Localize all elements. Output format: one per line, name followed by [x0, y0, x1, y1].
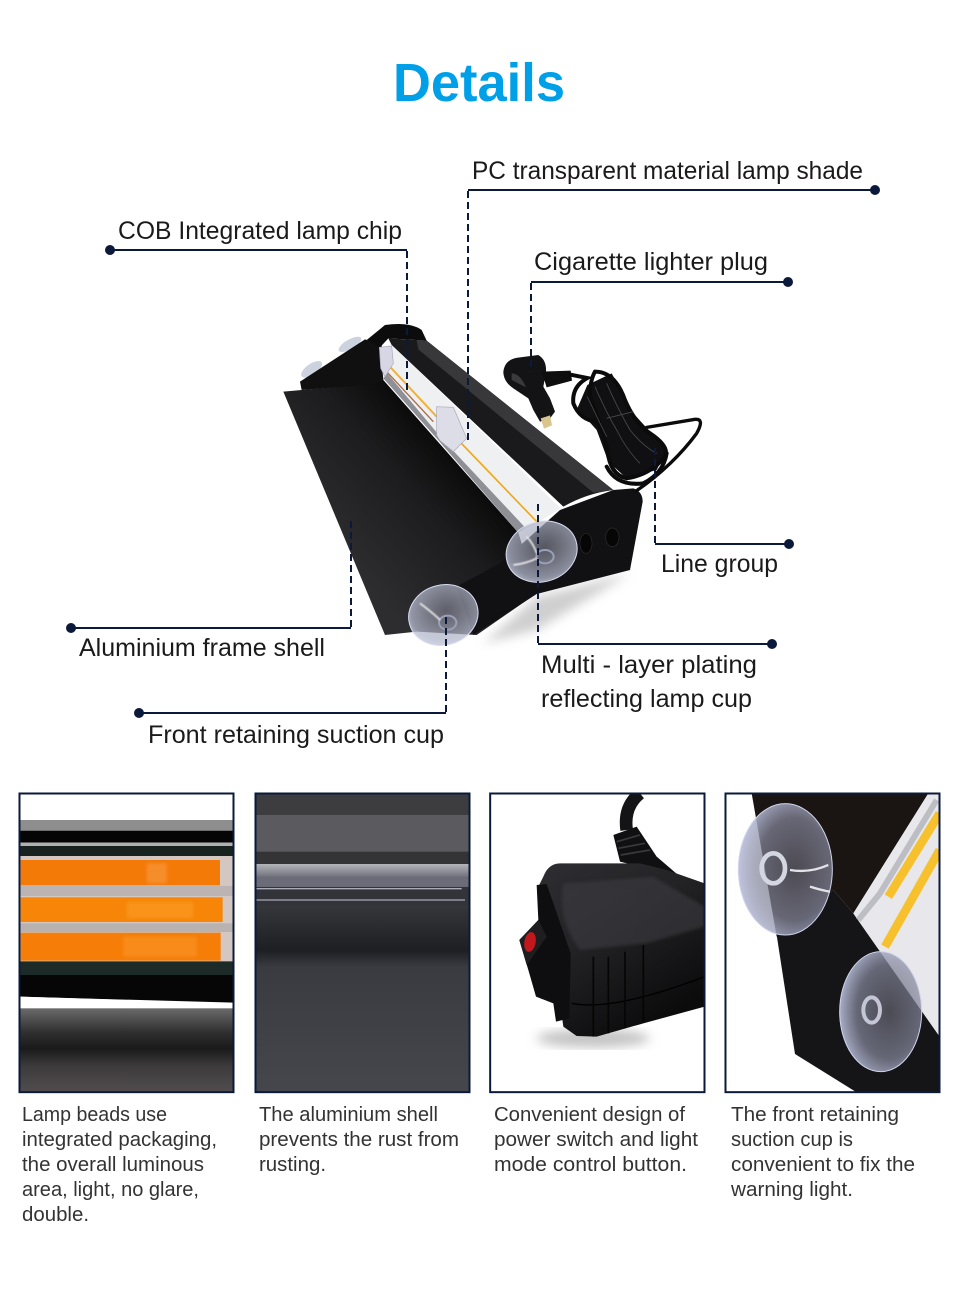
centre lens clip: [437, 407, 467, 452]
callout: Cigarette lighter plug: [531, 248, 793, 372]
callout: Aluminium frame shell: [66, 517, 351, 662]
callout: Multi-layer plating reflecting lamp cup: reflecting lamp cup: [541, 685, 752, 713]
callout: Cigarette lighter plug: Cigarette lighter plug: [534, 248, 768, 276]
red indicator: [524, 932, 536, 952]
callout: PC transparent material lamp shade: PC transparent material lamp shade: [472, 157, 863, 185]
caption: lamp beads: the overall luminous: [22, 1154, 204, 1176]
top suction cups: [298, 333, 364, 382]
plug body: [503, 355, 555, 422]
switch housing: [538, 863, 705, 1037]
lower suction cup: [840, 952, 922, 1072]
product photo: strobe light bar: [283, 324, 643, 653]
callout: Multi-layer plating reflecting lamp cup: Multi - layer plating: [541, 651, 757, 679]
ground shadow: [483, 573, 630, 643]
coil mass: [577, 373, 667, 478]
caption: aluminium shell: prevents the rust from: [259, 1129, 459, 1151]
plug tip: [541, 415, 552, 429]
dark bracket: [752, 793, 928, 937]
callout: COB Integrated lamp chip: COB Integrated lamp chip: [118, 217, 402, 245]
panel: suction cups photo: [725, 793, 940, 1092]
rocker switch: [519, 884, 571, 1022]
lower bracket band and end plate: [457, 488, 643, 635]
shadow: [537, 1029, 650, 1048]
caption: suction cup: [730, 1104, 915, 1201]
caption: lamp beads: integrated packaging,: [22, 1129, 217, 1151]
front suction cups: [402, 512, 585, 653]
caption: aluminium shell: The aluminium shell: [259, 1104, 438, 1126]
orange COB strips: [21, 860, 223, 961]
callout: COB Integrated lamp chip: [105, 217, 407, 390]
COB chip stripes: [388, 365, 437, 417]
lamp lens: [853, 793, 940, 1037]
title: Details: [393, 53, 565, 113]
caption: suction cup: suction cup is: [731, 1129, 853, 1151]
housing top strip: [388, 338, 613, 507]
aluminium bracket body: [283, 380, 537, 635]
caption: suction cup: warning light.: [730, 1179, 853, 1201]
strain relief: [613, 826, 676, 874]
cable highlights: [587, 383, 657, 463]
caption: suction cup: convenient to fix the: [731, 1154, 915, 1176]
cable: [626, 793, 640, 830]
callout: Multi-layer plating reflecting lamp cup: [538, 503, 777, 713]
cable tail: [637, 419, 700, 491]
caption: lamp beads: [22, 1104, 217, 1226]
callout: Front retaining suction cup: Front retaining suction cup: [148, 721, 444, 749]
caption: lamp beads: double.: [22, 1204, 89, 1226]
caption: suction cup: The front retaining: [731, 1104, 899, 1126]
strain relief: [542, 371, 572, 387]
panel: lamp beads photo: [19, 793, 234, 1092]
caption: lamp beads: Lamp beads use: [22, 1104, 167, 1126]
cigarette plug and coiled cable: [503, 355, 700, 491]
callout: Aluminium frame shell: Aluminium frame shell: [79, 634, 325, 662]
cable coils: [571, 372, 667, 484]
callout: Line group: [655, 444, 794, 578]
side screws: [580, 528, 619, 553]
panel: power switch photo: [490, 793, 705, 1092]
yellow chips: [885, 813, 940, 947]
callout: Line group: Line group: [661, 550, 778, 578]
caption: aluminium shell: [259, 1104, 459, 1176]
caption: aluminium shell: rusting.: [259, 1154, 326, 1176]
top fold of bracket: [300, 339, 383, 390]
housing cap: [367, 324, 427, 347]
panel: aluminium shell photo: [255, 793, 470, 1092]
transparent lamp shade: [379, 345, 561, 533]
caption: power switch: power switch and light: [494, 1129, 698, 1151]
upper suction cup: [738, 804, 832, 935]
callout: Front retaining suction cup: [134, 613, 446, 749]
caption: power switch: Convenient design of: [494, 1104, 685, 1126]
caption: power switch: mode control button.: [494, 1154, 687, 1176]
callout: PC transparent material lamp shade: [468, 157, 880, 440]
caption: lamp beads: area, light, no glare,: [22, 1179, 199, 1201]
caption: power switch: [494, 1104, 698, 1176]
